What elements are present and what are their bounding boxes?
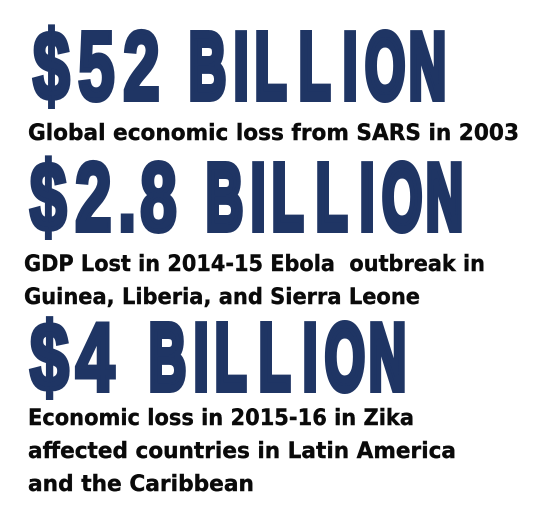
stat heading: $2.8 billion: $2.8 [30,143,177,252]
caption: Ebola GDP loss: Guinea, Liberia, and Sierra Leone [24,285,420,310]
stat heading: $4 billion: BILLION [149,305,406,409]
caption: SARS loss: Global economic loss from SARS in 2003 [28,121,519,146]
caption: Zika loss: affected countries in Latin America [28,439,456,464]
caption: Ebola GDP loss [24,252,485,310]
stat heading: $4 billion [30,302,406,411]
stat heading: $52 billion: BILLION [189,14,446,118]
stat heading: $52 billion [33,12,446,121]
stat heading: $52 billion: $52 [33,12,160,121]
caption: Ebola GDP loss: GDP Lost in 2014-15 Ebola outbreak in [24,252,485,277]
caption: Zika loss [28,406,456,497]
caption: Zika loss: Economic loss in 2015-16 in Zika [28,406,414,431]
caption: Zika loss: and the Caribbean [28,472,254,497]
stat heading: $4 billion: $4 [30,302,114,411]
stat heading: $2.8 billion [30,143,463,252]
stat heading: $2.8 billion: BILLION [206,145,463,249]
